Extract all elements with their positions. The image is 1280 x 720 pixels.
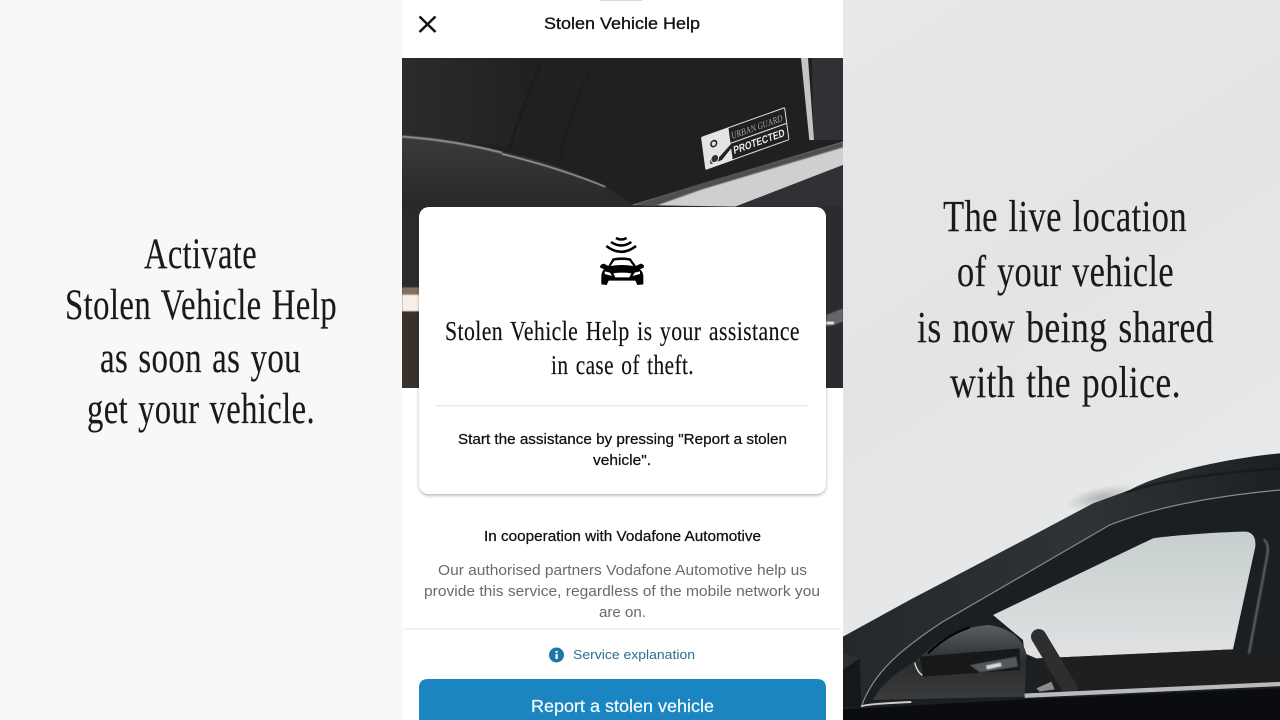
- cooperation body text: [424, 563, 820, 621]
- icon: close: [420, 16, 436, 32]
- cooperation body text: Our authorised partners Vodafone Automotive help us: [438, 563, 807, 579]
- heading: activate message: Stolen Vehicle Help: [65, 282, 337, 329]
- heading: live location message: The live location: [943, 192, 1187, 241]
- panel: left message: [0, 0, 402, 720]
- illustration: car side window: [843, 453, 1280, 720]
- card headline: Stolen Vehicle Help is your assistance: [445, 316, 800, 346]
- cooperation heading: In cooperation with Vodafone Automotive: [484, 529, 761, 545]
- heading: live location message: of your vehicle: [957, 247, 1174, 296]
- button: report a stolen vehicle: Report a stolen vehicle: [531, 696, 714, 716]
- heading: activate message: Activate: [144, 231, 257, 278]
- heading: live location message: with the police.: [950, 358, 1181, 407]
- card instruction: [458, 432, 787, 469]
- panel: right message: [843, 0, 1280, 720]
- link: service explanation: Service explanation: [573, 647, 695, 662]
- card headline: [445, 316, 800, 380]
- heading: activate message: [65, 231, 337, 433]
- sticker: urban guard protected: PROTECTED: [733, 127, 785, 157]
- icon: car with signal waves: [600, 238, 644, 285]
- card instruction: Start the assistance by pressing "Report a stolen: [458, 432, 787, 448]
- button: report a stolen vehicle: [419, 679, 826, 720]
- cooperation body text: provide this service, regardless of the mobile network you: [424, 584, 820, 600]
- panel: phone screen: [402, 0, 843, 720]
- icon: info: [549, 648, 564, 662]
- card instruction: vehicle".: [593, 453, 651, 469]
- heading: activate message: get your vehicle.: [87, 386, 315, 433]
- card headline: in case of theft.: [551, 350, 694, 380]
- sticker: urban guard protected: URBAN GUARD: [731, 113, 783, 142]
- heading: activate message: as soon as you: [100, 335, 301, 382]
- photo: car window with sticker: [402, 58, 843, 388]
- heading: live location message: [917, 192, 1214, 407]
- heading: live location message: is now being shared: [917, 303, 1214, 352]
- cooperation body text: are on.: [599, 605, 646, 621]
- sticker: urban guard protected: [701, 107, 789, 170]
- card: stolen vehicle help info: [419, 207, 826, 494]
- screen title: Stolen Vehicle Help: [544, 14, 700, 33]
